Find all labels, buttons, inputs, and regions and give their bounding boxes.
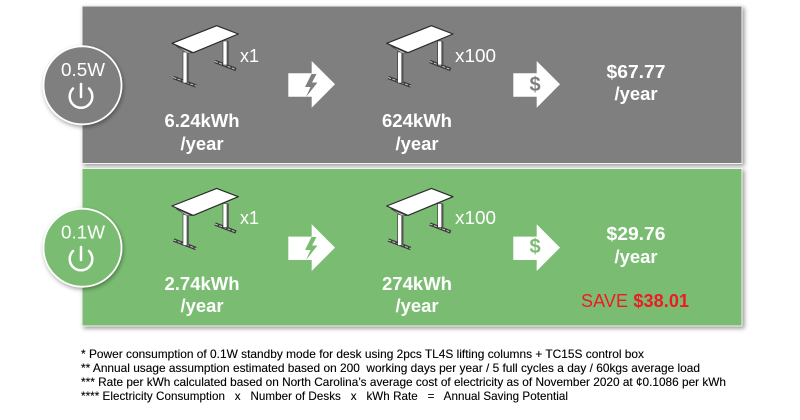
panel: 0.5W standby xyxy=(44,6,742,164)
energy value xyxy=(382,111,452,154)
footnotes: *** Rate per kWh calculated based on North Carolina’s average cost of electricity as of November 2020 at ¢0.1086 per kWh xyxy=(81,376,726,389)
footnotes: ** Annual usage assumption estimated based on 200 working days per year / 5 full cycles a day / 60kgs average load xyxy=(81,362,700,375)
arrow: dollar xyxy=(513,224,560,271)
desk icon x1 xyxy=(172,188,238,248)
badge: 0.1W power xyxy=(44,209,122,287)
cost value xyxy=(606,62,666,104)
arrow: dollar: $ xyxy=(529,74,541,96)
energy value: 2.74kWh xyxy=(164,274,240,294)
energy value xyxy=(382,274,452,316)
cost value xyxy=(606,224,666,267)
cost value: /year xyxy=(614,247,658,267)
savings callout: SAVE $38.01 xyxy=(581,291,689,311)
cost value: /year xyxy=(614,84,658,104)
badge: 0.1W power: 0.1W xyxy=(61,222,106,242)
desk icon x100 xyxy=(387,26,453,86)
energy value: /year xyxy=(396,296,438,316)
energy value: /year xyxy=(180,296,224,316)
energy value: 6.24kWh xyxy=(164,111,240,131)
label x1: x1 xyxy=(240,46,259,66)
footnotes: **** Electricity Consumption x Number of Desks x kWh Rate = Annual Saving Potential xyxy=(81,390,568,403)
badge: 0.5W power xyxy=(44,46,122,124)
energy value xyxy=(164,111,240,154)
cost value: $29.76 xyxy=(606,224,666,244)
label x100: x100 xyxy=(455,208,496,228)
desk icon x1 xyxy=(172,26,238,86)
arrow: electricity xyxy=(288,61,335,108)
energy value: /year xyxy=(396,134,438,154)
cost value: $67.77 xyxy=(606,62,666,82)
footnotes xyxy=(81,348,726,403)
label x1: x1 xyxy=(240,208,259,228)
energy value: 274kWh xyxy=(382,274,452,294)
energy value xyxy=(164,274,240,316)
label x100: x100 xyxy=(455,46,496,66)
footnotes: * Power consumption of 0.1W standby mode for desk using 2pcs TL4S lifting columns + TC15S control box xyxy=(81,348,644,361)
arrow: dollar: $ xyxy=(529,236,541,258)
panel: 0.1W standby xyxy=(44,168,742,326)
energy value: /year xyxy=(180,134,224,154)
arrow: dollar xyxy=(513,61,560,108)
badge: 0.5W power: 0.5W xyxy=(61,59,106,80)
energy value: 624kWh xyxy=(382,111,452,131)
arrow: electricity xyxy=(288,224,335,271)
desk icon x100 xyxy=(387,188,453,248)
